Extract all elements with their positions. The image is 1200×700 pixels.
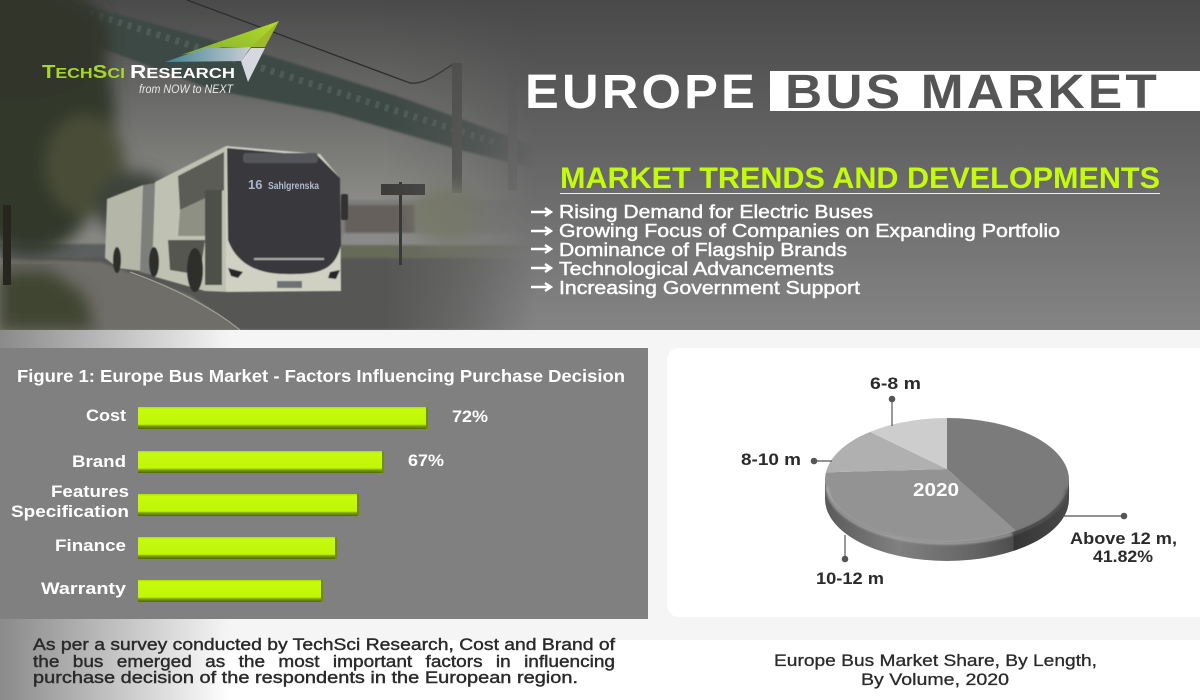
trends list: Technological Advancements [559,259,834,279]
pie top face [825,418,1069,542]
title: EUROPE [525,66,758,119]
trends list: Growing Focus of Companies on Expanding Portfolio [559,221,1060,241]
logo tagline: from NOW to NEXT [139,82,234,96]
callout: 10-12 m: 10-12 m [816,569,884,588]
callout: 10-12 m [816,535,884,588]
bus rear section [104,184,144,272]
callout: 8-10 m [741,450,832,469]
title band [770,71,1200,111]
pie slice: 6-8 m [870,418,947,469]
bar: brand [72,451,444,473]
title [525,66,1200,119]
bar: warranty: Warranty [41,579,127,598]
bar: features specification: Specification [11,502,129,521]
bus articulation joint [140,183,155,275]
bus front section side [152,146,232,292]
trends list: Dominance of Flagship Brands [559,240,847,260]
destination sign: Sahlgrenska [268,181,319,192]
header background [0,0,1200,330]
logo: TechSci Research: RESEARCH [130,62,235,82]
mirror [341,194,348,220]
photo horizon and ground [0,200,540,330]
callout: above 12 m: Above 12 m, [1070,529,1177,548]
logo name: TECH SCI [42,62,125,82]
pie slice: above 12 m [947,418,1069,531]
panel: pie chart [667,348,1200,620]
number plate [277,281,302,288]
title: BUS MARKET [785,66,1160,119]
bar: brand: 67% [408,451,444,470]
chart heading: Figure 1: Europe Bus Market - Factors Influencing Purchase Decision [17,366,625,386]
pie side wall [825,480,1069,561]
bar: finance: Finance [55,536,126,555]
bar: warranty [41,579,323,602]
bus front face [226,146,341,292]
pie caption [774,651,1097,689]
photo sky [62,48,498,245]
bar: brand: Brand [72,452,126,471]
photo grass [0,270,95,330]
panel: market trends [531,162,1160,298]
callout: above 12 m: 41.82% [1093,547,1153,566]
tree trunk [3,205,11,285]
pie bevel [827,487,1067,543]
callout: 8-10 m: 8-10 m [741,450,801,469]
logo: TechSci Research [42,21,279,96]
callout: 6-8 m: 6-8 m [870,374,921,393]
destination sign: 16 [248,177,262,192]
pie slice: 10-12 m [825,469,1016,542]
pie centre label: 2020 [913,480,959,500]
survey note: purchase decision of the respondents in the European region. [33,669,578,687]
trends heading: MARKET TRENDS AND DEVELOPMENTS [560,162,1160,195]
photo trees [0,0,486,255]
pie caption: Europe Bus Market Share, By Length, [774,651,1097,670]
survey note: the bus emerged as the most important factors in influencing [33,653,615,671]
path edge [130,272,240,330]
bus grille stripe [254,258,324,260]
pie caption: By Volume, 2020 [861,670,1009,689]
photo: bus under a bridge [0,0,540,330]
lower background [0,330,1200,700]
photo bridge [98,0,519,193]
trends list: Increasing Government Support [559,278,860,298]
trends list [559,202,1060,298]
head lights [228,268,243,278]
trends list: Rising Demand for Electric Buses [559,202,873,222]
survey note [33,636,615,687]
bar: features specification: Features [51,482,129,501]
panel: bar chart [0,348,648,619]
icon: list arrows [531,208,551,291]
destination sign [248,180,320,191]
bar: finance [55,536,337,559]
bar: cost: Cost [86,406,126,425]
logo mark [165,21,279,82]
bar: features specification [11,482,359,521]
callout: 6-8 m [870,374,921,426]
bar: cost [86,406,488,429]
windshield [227,148,341,274]
survey note: As per a survey conducted by TechSci Research, Cost and Brand of [33,636,615,654]
callout: above 12 m [1062,513,1177,566]
bus [105,146,348,292]
wheel arches [187,248,203,292]
bar: cost: 72% [452,407,488,426]
pie slice: 8-10 m [826,432,946,472]
road sign [381,182,425,265]
